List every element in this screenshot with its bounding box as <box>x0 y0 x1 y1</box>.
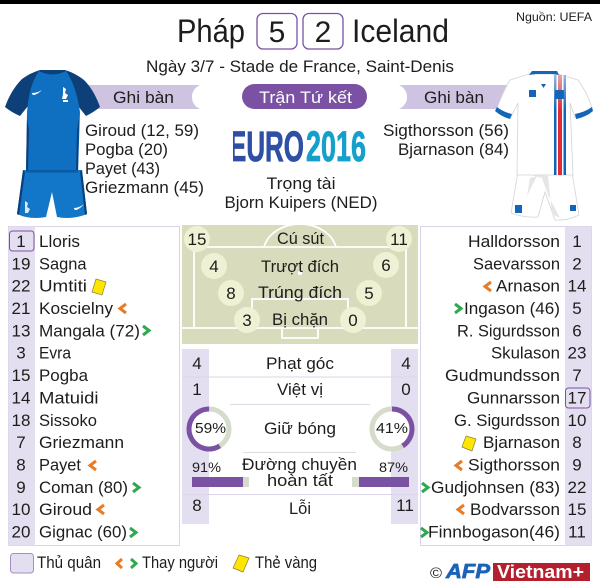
Iceland goal scorers: Sigthorsson (56) <box>383 121 509 140</box>
panel: Iceland lineup: Finnbogason(46) <box>428 522 560 542</box>
chart: Iceland pass completion bar <box>352 459 409 487</box>
panel: match statistics: Phạt góc <box>266 354 335 373</box>
panel: shots pitch: 3 <box>242 311 252 330</box>
panel: match statistics <box>181 349 418 524</box>
logo: AFP and Vietnam+ credit: © <box>430 565 442 582</box>
legend: Thủ quân <box>37 554 101 572</box>
chart: Iceland possession donut: 41% <box>376 420 408 437</box>
title: match score <box>177 13 449 49</box>
panel: France lineup: Sagna <box>39 254 87 273</box>
icon: France kit <box>5 70 100 218</box>
referee: Bjorn Kuipers (NED) <box>224 193 378 212</box>
panel: Iceland lineup: 15 <box>568 500 586 519</box>
panel: shots pitch: 15 <box>188 230 206 249</box>
panel: Iceland lineup: 9 <box>572 456 582 474</box>
panel: Iceland lineup: 7 <box>572 366 582 385</box>
panel: France lineup: Griezmann <box>39 433 124 452</box>
panel: Iceland lineup: Gudjohnsen (83) <box>431 478 560 497</box>
panel: France lineup: 15 <box>12 366 30 385</box>
France goal scorers: Pogba (20) <box>85 140 168 159</box>
panel: France lineup: 19 <box>12 254 30 273</box>
panel: shots pitch: Cú sút <box>277 229 324 248</box>
source note: Nguồn: UEFA <box>516 10 592 24</box>
panel: Iceland lineup: 2 <box>572 254 582 273</box>
panel: France lineup: Giroud <box>39 500 92 519</box>
panel: Iceland lineup: Halldorsson <box>468 232 560 251</box>
panel: match statistics: hoàn tất <box>267 471 333 490</box>
panel: shots pitch: Bị chặn <box>272 310 328 329</box>
logo: AFP and Vietnam+ credit: AFP <box>445 561 491 583</box>
panel: France lineup: 3 <box>16 344 26 363</box>
chart: Iceland possession donut <box>372 409 412 449</box>
panel: France lineup: Lloris <box>39 232 80 251</box>
panel: Iceland lineup: 6 <box>572 321 582 340</box>
referee: Trọng tài <box>266 174 336 193</box>
panel: Iceland lineup: Saevarsson <box>473 254 560 273</box>
logo: Euro 2016: 2016 <box>306 123 366 171</box>
badge: quarter final <box>242 84 367 109</box>
panel: match statistics: Lỗi <box>289 499 311 518</box>
panel: shots pitch: 5 <box>364 284 374 303</box>
Iceland goal scorers <box>383 121 509 159</box>
panel: match statistics: Giữ bóng <box>264 419 336 438</box>
chart: France pass completion bar: 91% <box>192 459 221 475</box>
panel: France lineup: 20 <box>12 522 30 542</box>
panel: Iceland lineup: 10 <box>568 411 586 430</box>
match date and venue: Ngày 3/7 - Stade de France, Saint-Denis <box>146 57 454 76</box>
panel: match statistics: 4 <box>192 354 202 373</box>
legend: Thay người <box>142 554 218 572</box>
panel: shots pitch: 6 <box>381 256 391 275</box>
panel: match statistics: 0 <box>401 380 411 399</box>
chart: Iceland pass completion bar: 87% <box>379 459 408 475</box>
chart: France pass completion bar <box>192 459 249 487</box>
ribbon: France scorers heading <box>88 85 200 109</box>
referee <box>224 174 378 212</box>
badge: quarter final: Trận Tứ kết <box>259 88 352 107</box>
panel: shots pitch: 11 <box>390 230 408 249</box>
chart: France possession donut: 59% <box>195 420 226 437</box>
panel: match statistics: Việt vị <box>277 380 323 399</box>
panel: Iceland lineup: 11 <box>568 522 586 542</box>
panel: France lineup <box>8 226 180 546</box>
panel: France lineup: Umtiti <box>39 277 87 296</box>
panel: France lineup: 22 <box>12 277 30 296</box>
ribbon: France scorers heading: Ghi bàn <box>113 88 174 107</box>
panel: Iceland lineup: 14 <box>568 277 586 296</box>
panel: shots pitch: 4 <box>209 257 219 276</box>
panel: France lineup: Evra <box>39 344 71 363</box>
panel: France lineup: Gignac (60) <box>39 522 127 542</box>
panel: France lineup: 10 <box>12 500 30 519</box>
panel: France lineup: 14 <box>12 388 30 407</box>
France goal scorers: Griezmann (45) <box>85 178 204 197</box>
panel: France lineup: Mangala (72) <box>39 321 140 340</box>
panel: Iceland lineup: Sigthorsson <box>468 456 560 474</box>
panel: match statistics: 8 <box>192 496 202 515</box>
panel: shots pitch: 8 <box>226 284 236 303</box>
panel: Iceland lineup: Gudmundsson <box>445 366 560 385</box>
panel: Iceland lineup <box>420 226 592 546</box>
Iceland goal scorers: Bjarnason (84) <box>398 140 509 159</box>
ribbon: Iceland scorers heading <box>399 85 512 109</box>
panel: match statistics: Đường chuyền <box>242 455 357 474</box>
panel: Iceland lineup: Skulason <box>491 344 560 363</box>
France goal scorers: Payet (43) <box>85 159 160 178</box>
panel: France lineup: Pogba <box>39 366 89 385</box>
panel: Iceland lineup: R. Sigurdsson <box>457 321 560 340</box>
panel: France lineup: 9 <box>16 478 26 497</box>
panel: Iceland lineup: 1 <box>572 232 582 251</box>
logo: Euro 2016: EURO <box>229 123 304 171</box>
panel: Iceland lineup: Bodvarsson <box>470 500 560 519</box>
France goal scorers: Giroud (12, 59) <box>85 121 199 140</box>
panel: France lineup: 8 <box>16 456 26 474</box>
legend: Thẻ vàng <box>255 554 317 572</box>
panel: France lineup: Matuidi <box>39 388 98 407</box>
chart: France possession donut <box>181 401 237 457</box>
panel: match statistics: 4 <box>401 354 411 373</box>
panel: Iceland lineup: 5 <box>572 299 582 318</box>
panel: France lineup: 18 <box>12 411 30 430</box>
panel: France lineup: Koscielny <box>39 299 113 318</box>
panel: shots pitch <box>182 224 418 344</box>
panel: Iceland lineup: Bjarnason <box>483 433 560 452</box>
logo: AFP and Vietnam+ credit <box>430 561 590 583</box>
title: match score: 2 <box>315 16 331 49</box>
panel: Iceland lineup: Arnason <box>496 277 560 296</box>
title: match score: 5 <box>269 16 285 49</box>
panel: France lineup: 7 <box>16 433 26 452</box>
panel: Iceland lineup: 23 <box>568 344 586 363</box>
ribbon: Iceland scorers heading: Ghi bàn <box>424 88 484 107</box>
panel: Iceland lineup: Ingason (46) <box>464 299 560 318</box>
title: match score: Pháp <box>177 13 245 49</box>
legend <box>10 554 317 573</box>
panel: France lineup: Sissoko <box>39 411 97 430</box>
panel: France lineup: 21 <box>12 299 30 318</box>
icon: Iceland kit <box>495 71 593 220</box>
panel: France lineup: 13 <box>12 321 30 340</box>
panel: France lineup: Coman (80) <box>39 478 128 497</box>
panel: Iceland lineup: G. Sigurdsson <box>454 411 560 430</box>
logo: AFP and Vietnam+ credit: Vietnam+ <box>497 562 584 582</box>
panel: match statistics: 1 <box>192 380 202 399</box>
panel: France lineup: Payet <box>39 456 81 474</box>
panel: Iceland lineup: Gunnarsson <box>467 388 560 407</box>
panel: match statistics: 11 <box>396 496 414 515</box>
panel: Iceland lineup: 8 <box>572 433 582 452</box>
France goal scorers <box>85 121 204 197</box>
panel: Iceland lineup: 17 <box>568 388 586 407</box>
panel: shots pitch: 0 <box>348 311 358 330</box>
panel: France lineup: 1 <box>16 232 26 251</box>
panel: shots pitch: Trúng đích <box>258 283 342 302</box>
panel: Iceland lineup: 22 <box>568 478 586 497</box>
panel: shots pitch: Trượt đích <box>261 257 339 276</box>
title: match score: Iceland <box>352 13 449 49</box>
